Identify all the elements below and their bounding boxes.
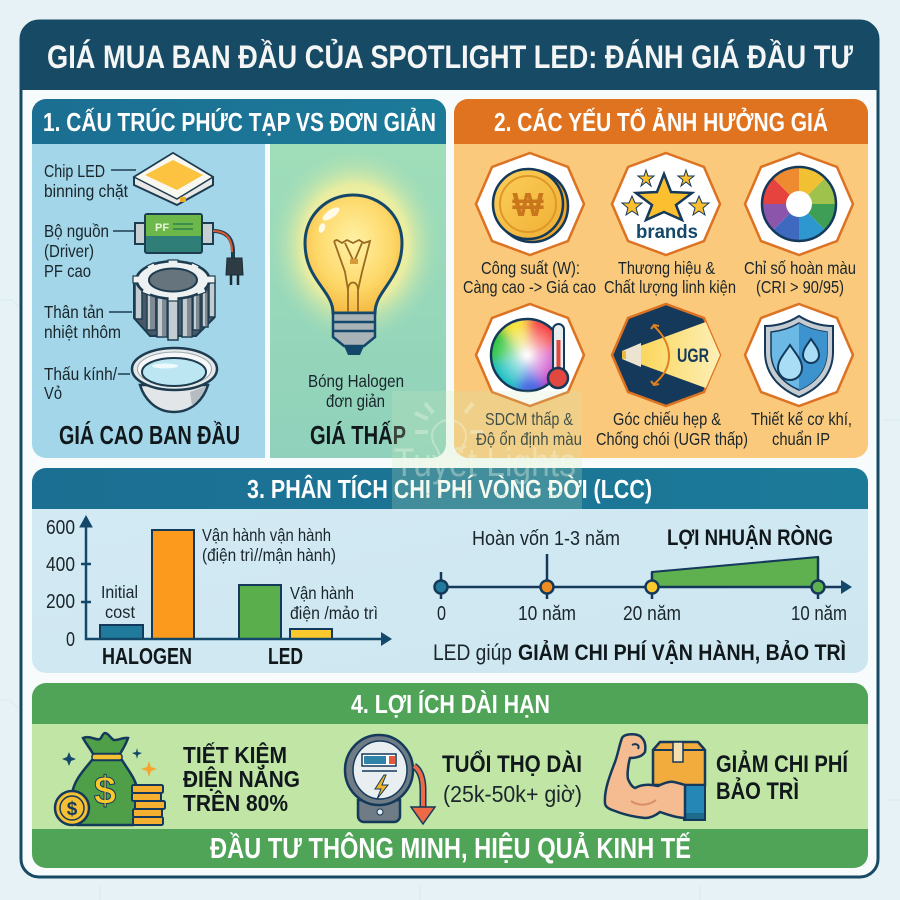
label: low price: GIÁ THẤP	[310, 420, 406, 450]
icon: LED chip	[111, 153, 213, 205]
icon: heatsink	[109, 260, 215, 340]
timeline: LỢI NHUẬN RÒNG	[667, 525, 833, 550]
icon: color wheel CRI	[745, 153, 853, 255]
timeline: Hoàn vốn 1-3 năm	[472, 528, 620, 550]
text: tiết kiệm	[183, 741, 300, 816]
timeline: 0	[437, 603, 446, 625]
bar chart: Initial	[101, 582, 138, 602]
icon: driver	[113, 214, 243, 285]
panel: 4. lợi ích	[32, 683, 868, 868]
label: chip LED: Chip LED	[44, 161, 105, 181]
icon: money bag: $	[67, 799, 78, 820]
bar chart: điện /mảo trì	[290, 603, 378, 623]
icon: beam UGR: UGR	[677, 346, 709, 367]
text: CRI	[744, 258, 856, 297]
text: tuổi thọ	[442, 750, 582, 807]
icon: halogen bulb	[267, 145, 443, 355]
timeline: 10 năm	[791, 603, 847, 625]
text: tuổi thọ: TUỔI THỌ DÀI	[442, 750, 582, 778]
bar chart: 0	[66, 629, 75, 651]
icon: coin: ₩	[512, 186, 544, 223]
text: IP: chuẩn IP	[772, 429, 830, 449]
icon: IP shield	[745, 304, 853, 406]
icon: electric meter	[345, 735, 435, 824]
text: tiết kiệm: TRÊN 80%	[183, 789, 288, 816]
bar chart	[46, 516, 392, 669]
icon: driver: PF	[155, 222, 169, 234]
text: thương hiệu	[604, 258, 736, 297]
bar chart: Vận hành vận hành	[202, 525, 331, 545]
heading: section 1: 1. CẤU TRÚC PHỨC TẠP VS ĐƠN GIẢN	[43, 107, 436, 137]
label: driver: Bộ nguồn	[44, 221, 109, 241]
text: UGR: Chống chói (UGR thấp)	[596, 429, 748, 449]
text: công suất: Công suất (W):	[481, 258, 580, 278]
heading: section 2: 2. CÁC YẾU TỐ ẢNH HƯỞNG GIÁ	[494, 106, 828, 137]
bar chart: HALOGEN	[102, 643, 192, 669]
heading: section 4: 4. LỢI ÍCH DÀI HẠN	[351, 689, 550, 719]
text: thương hiệu: Chất lượng linh kiện	[604, 277, 736, 297]
label: driver	[44, 221, 109, 281]
text: giảm chi phí	[716, 749, 849, 805]
icon: SDCM wheel and thermometer	[476, 304, 584, 406]
bar chart: cost	[105, 602, 135, 622]
text: SDCM	[476, 409, 582, 449]
bar chart: 200	[46, 591, 75, 613]
text: IP	[751, 409, 852, 449]
label: chip LED: binning chặt	[44, 181, 128, 201]
label: lens: Vỏ	[44, 383, 62, 403]
timeline	[434, 525, 852, 625]
text: công suất: Càng cao -> Giá cao	[463, 277, 596, 297]
watermark: Đèn chuẩn - Không gian chất	[425, 490, 568, 507]
icon: lens	[132, 348, 217, 412]
text: CRI: (CRI > 90/95)	[756, 277, 844, 297]
label: halogen: Bóng Halogen	[308, 371, 404, 391]
title	[20, 20, 879, 90]
icon: money bag: $	[94, 769, 116, 813]
text: UGR: Góc chiếu hẹp &	[613, 409, 721, 429]
label: heatsink: Thân tản	[44, 302, 104, 322]
icon: brands: brands	[636, 222, 698, 243]
heading: section 3: 3. PHÂN TÍCH CHI PHÍ VÒNG ĐỜI (LCC)	[247, 474, 652, 504]
label: driver: PF cao	[44, 261, 91, 281]
footer banner text: ĐẦU TƯ THÔNG MINH, HIỆU QUẢ KINH TẾ	[210, 831, 691, 865]
label: halogen: đơn giản	[326, 391, 385, 411]
text: tuổi thọ: (25k-50k+ giờ)	[443, 781, 582, 807]
watermark	[392, 391, 582, 509]
text: công suất	[463, 258, 596, 297]
bar chart: Vận hành	[290, 583, 354, 603]
bar chart: 600	[46, 517, 75, 539]
label: lens	[44, 364, 130, 403]
text: giảm chi phí: BẢO TRÌ	[716, 776, 799, 805]
text: LED saving note: LED giúp	[433, 640, 512, 665]
text: SDCM: SDCM thấp &	[485, 409, 573, 429]
panel: 3. LCC	[32, 468, 868, 673]
icon: beam UGR	[612, 304, 722, 406]
label: heatsink: nhiệt nhôm	[44, 322, 121, 342]
icon: strong arm with box	[605, 734, 705, 820]
icon: brands	[612, 153, 720, 255]
text: CRI: Chỉ số hoàn màu	[744, 258, 856, 278]
text: tiết kiệm: ĐIỆN NĂNG	[183, 765, 300, 792]
label: halogen	[308, 371, 404, 411]
label: driver: (Driver)	[44, 241, 94, 261]
label: high price: GIÁ CAO BAN ĐẦU	[59, 420, 240, 450]
label: lens: Thấu kính/	[44, 364, 117, 384]
text: giảm chi phí: GIẢM CHI PHÍ	[716, 749, 849, 778]
icon: money bag	[55, 733, 165, 825]
bar chart: 400	[46, 554, 75, 576]
watermark: Tuyết Lights	[394, 441, 576, 485]
icon: coin	[476, 153, 584, 255]
text: UGR	[596, 409, 748, 449]
label: heatsink	[44, 302, 121, 342]
panel: 2. các yếu tố	[454, 99, 868, 458]
text: thương hiệu: Thương hiệu &	[618, 258, 715, 278]
label: chip LED	[44, 161, 128, 201]
panel: 1. cấu trúc	[32, 99, 446, 458]
bar chart: (điện trì//mận hành)	[202, 545, 336, 565]
text: tiết kiệm: TIẾT KIỆM	[183, 741, 287, 768]
bar chart: LED	[268, 643, 303, 669]
text: SDCM: Độ ổn định màu	[476, 429, 582, 449]
timeline: 20 năm	[623, 603, 681, 625]
text: LED saving note: GIẢM CHI PHÍ VẬN HÀNH, BẢO TRÌ	[518, 640, 846, 665]
text: IP: Thiết kế cơ khí,	[751, 409, 852, 429]
timeline: 10 năm	[518, 603, 576, 625]
